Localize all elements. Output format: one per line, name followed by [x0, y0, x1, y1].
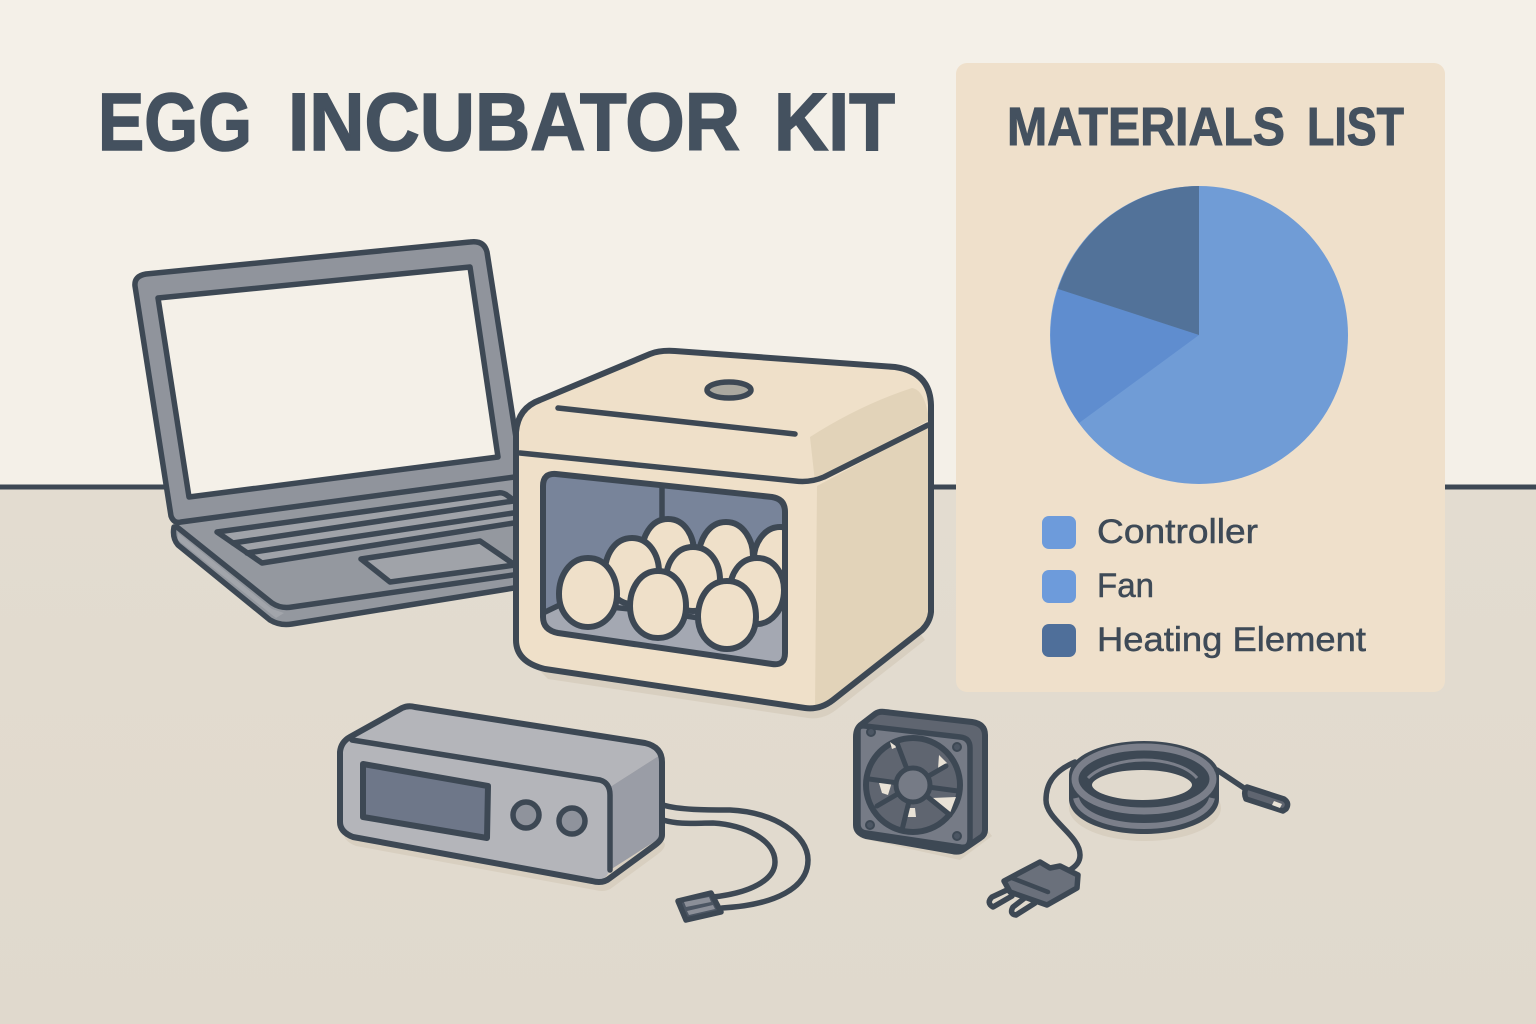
- cord shadow: [1069, 775, 1221, 841]
- trackpad: [361, 541, 515, 582]
- controller outline: [340, 706, 662, 882]
- title: [98, 77, 895, 168]
- legend item: heating element: Heating Element: [1097, 621, 1367, 659]
- incubator outline: [516, 351, 931, 708]
- incubator: [516, 351, 931, 718]
- controller box: [340, 706, 808, 920]
- sensor tip: [1217, 770, 1288, 811]
- slice: fan: [1051, 289, 1199, 423]
- lid seam: [520, 425, 928, 482]
- lid knob: [707, 382, 751, 398]
- plug: [989, 862, 1078, 915]
- legend item: fan: Fan: [1097, 567, 1154, 605]
- fan shadow: [860, 820, 992, 860]
- laptop base: [174, 476, 530, 625]
- incubator side shading: [815, 426, 929, 708]
- incubator body: [516, 351, 931, 708]
- incubator window: [540, 474, 806, 670]
- controller display: [363, 764, 488, 838]
- table surface: [0, 487, 1536, 1024]
- power cord: [989, 741, 1288, 915]
- legend item: fan: [1042, 567, 1154, 605]
- controller buttons: [513, 802, 585, 834]
- lid slot: [558, 408, 795, 434]
- controller shadow: [343, 809, 665, 891]
- incubator shadow: [519, 610, 925, 718]
- panel: materials list: [956, 63, 1445, 692]
- laptop: [135, 242, 530, 625]
- fan blades: [866, 738, 960, 832]
- keyboard: [217, 493, 520, 563]
- controller cables: [663, 805, 808, 920]
- pie chart: [1050, 186, 1348, 484]
- fan screws: [866, 728, 961, 840]
- slice: heating element: [1058, 186, 1199, 335]
- legend item: controller: Controller: [1097, 513, 1258, 551]
- connector plug: [678, 893, 721, 920]
- fan: [856, 712, 992, 860]
- title: KIT: [774, 77, 895, 168]
- legend item: controller: [1042, 513, 1258, 551]
- background wall: [0, 0, 1536, 487]
- legend: [1042, 513, 1367, 659]
- laptop screen: [158, 267, 498, 497]
- title: EGG: [98, 77, 252, 168]
- cord lead: [1046, 762, 1080, 870]
- title: INCUBATOR: [288, 77, 740, 168]
- panel heading: LIST: [1307, 97, 1404, 157]
- controller top face: [350, 706, 660, 787]
- coil: [1069, 741, 1219, 834]
- fan housing: [856, 712, 985, 852]
- controller front face: [341, 740, 610, 880]
- fan front: [858, 726, 970, 847]
- eggs: [559, 519, 806, 649]
- laptop lid: [135, 242, 522, 522]
- controller side face: [610, 755, 660, 870]
- fan hub: [896, 768, 930, 802]
- panel heading: MATERIALS: [1007, 97, 1285, 157]
